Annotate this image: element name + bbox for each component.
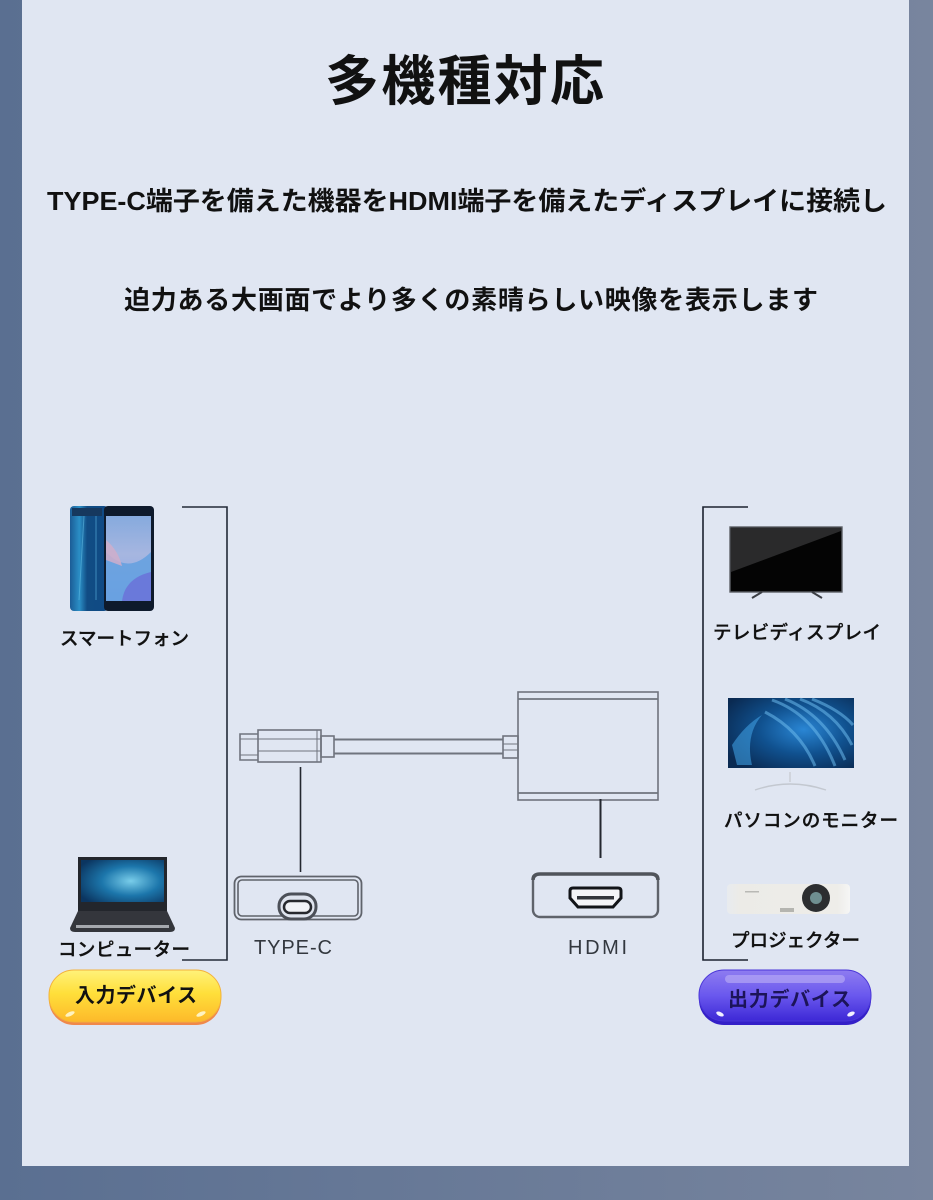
label: HDMI: HDMI — [568, 937, 627, 959]
text block: description line 2: 迫力ある大画面でより多くの素晴らしい映像を表示します — [124, 285, 818, 315]
button: output devices — [699, 970, 871, 1025]
adapter body — [518, 692, 658, 800]
title: 多機種対応 — [325, 52, 607, 112]
bracket: output devices — [703, 507, 748, 960]
bracket: input devices — [182, 507, 227, 960]
cable — [334, 740, 503, 754]
label: smartphone: スマートフォン — [60, 628, 189, 649]
icon: HDMI port — [533, 874, 658, 917]
Type-C plug — [240, 734, 258, 760]
line: HDMI pointer — [600, 799, 602, 858]
label: PC monitor: パソコンのモニター — [724, 810, 898, 831]
icon: television — [730, 527, 842, 598]
icon: laptop — [70, 857, 175, 932]
icon: projector — [727, 884, 850, 914]
label: projector: プロジェクター — [731, 930, 860, 951]
icon: smartphone — [70, 506, 154, 611]
connector — [503, 736, 518, 758]
icon: monitor — [728, 698, 854, 790]
button: input devices — [49, 970, 221, 1025]
line: Type-C pointer — [300, 767, 302, 872]
text block: description line 1: TYPE-C端子を備えた機器をHDMI端子を備えたディスプレイに接続し — [47, 186, 887, 216]
label: computer: コンピューター — [58, 939, 190, 960]
label: Type-C: TYPE-C — [254, 937, 332, 959]
button: input devices: 入力デバイス — [75, 983, 197, 1007]
illustration: adapter outline — [240, 692, 658, 800]
button: output devices: 出力デバイス — [728, 987, 851, 1011]
icon: Type-C port — [234, 876, 362, 920]
label: television display: テレビディスプレイ — [713, 622, 881, 643]
